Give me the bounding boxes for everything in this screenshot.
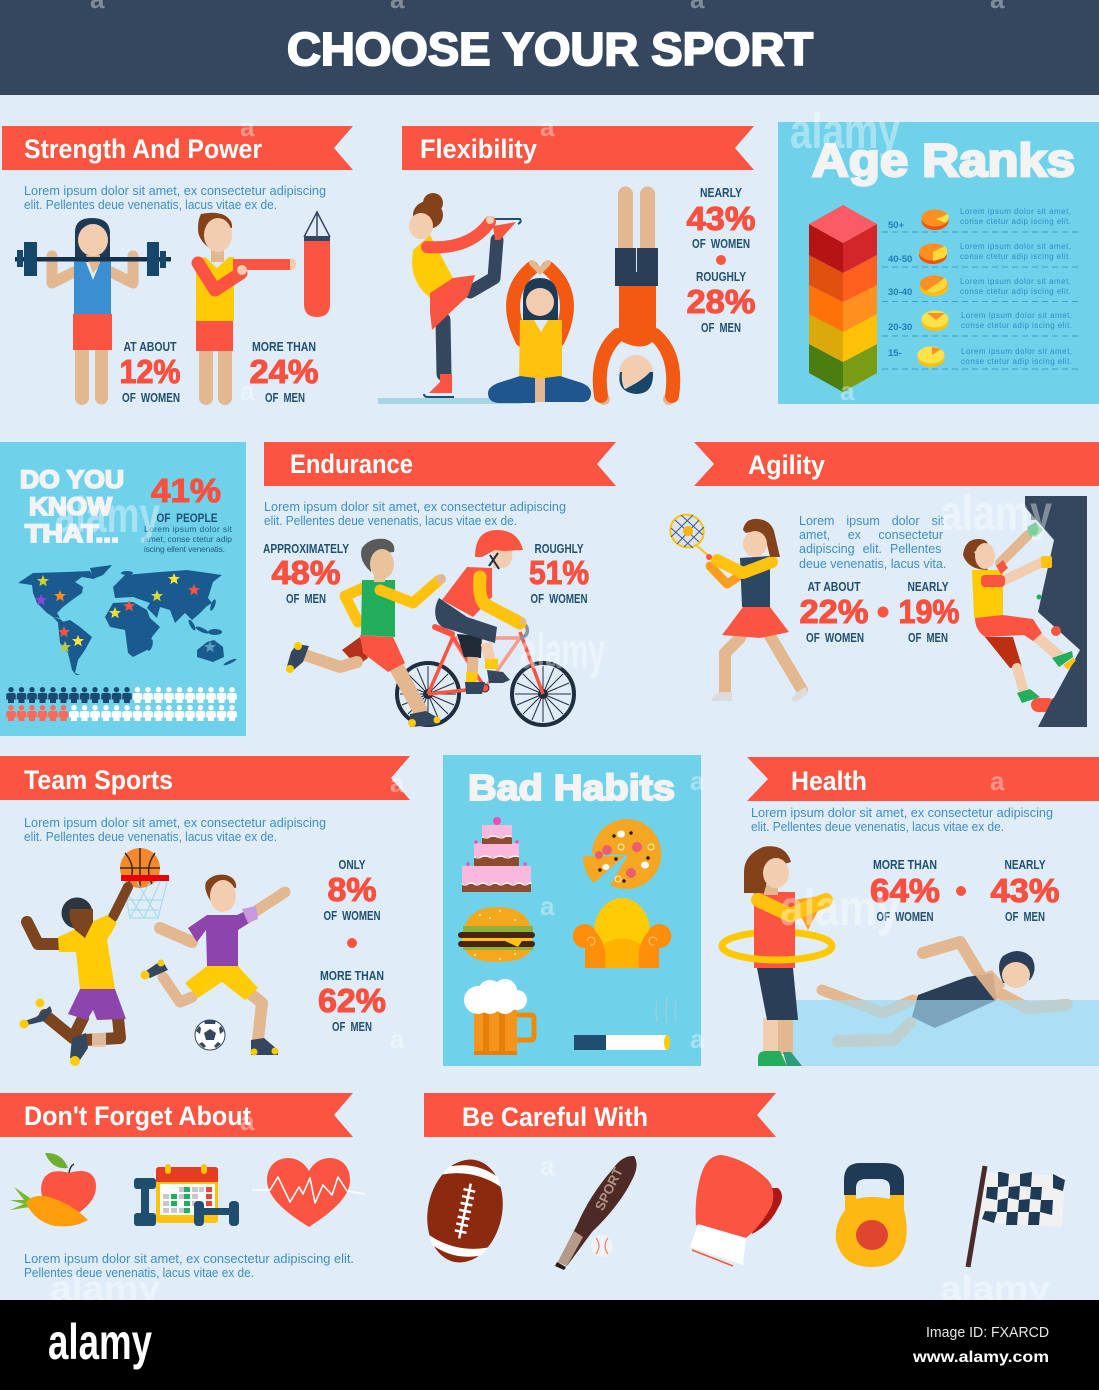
text: don't forget description xyxy=(24,1252,354,1280)
text: don't forget description: Pellentes deue venenatis, lacus vitae ex de. xyxy=(24,1266,254,1280)
heading: do you know that: DO YOU xyxy=(20,466,124,494)
icon: cake xyxy=(462,817,531,892)
text: age row notes: Lorem ipsum dolor sit amet, xyxy=(961,311,1072,320)
text: agility description xyxy=(799,514,946,571)
heading: age ranks: Age Ranks xyxy=(812,134,1075,186)
text: health description xyxy=(751,806,1053,834)
stat: men 28% xyxy=(686,270,756,335)
text: strength description xyxy=(24,184,326,212)
chart: age rows with pies: 20-30 xyxy=(888,322,912,333)
watermarks: a xyxy=(990,766,1005,796)
stat: men 24%: 24% xyxy=(250,353,318,390)
text: endurance description xyxy=(264,500,566,528)
icon: pizza xyxy=(583,819,661,889)
stat: men 43%: NEARLY xyxy=(1004,858,1046,872)
text: age row notes xyxy=(960,207,1072,366)
watermarks: alamy xyxy=(780,880,900,936)
watermarks: alamy xyxy=(940,485,1052,541)
watermarks: alamy xyxy=(790,103,900,159)
text: agility description: amet, ex consectetur xyxy=(799,528,943,542)
stat: women 51%: ROUGHLY xyxy=(534,542,584,556)
icon: cigarette xyxy=(574,997,676,1050)
pie: 15- xyxy=(918,346,944,367)
panel: don't forget about xyxy=(0,1093,365,1280)
stat: men 48%: APPROXIMATELY xyxy=(263,542,350,556)
text: age row notes: conse ctetur adip iscing elit. xyxy=(961,321,1072,330)
stat: men 24% xyxy=(250,340,318,405)
banner: agility xyxy=(694,442,1099,486)
text: age row notes: conse ctetur adip iscing elit. xyxy=(961,357,1072,366)
watermarks: a xyxy=(540,1151,555,1181)
stat: women 43% xyxy=(686,186,756,251)
chart: pictogram row one xyxy=(6,687,237,703)
figure: man punching xyxy=(196,213,296,405)
banner: don't forget about xyxy=(0,1093,353,1137)
stat: 41% of people xyxy=(144,472,233,554)
icon: burger xyxy=(458,907,535,962)
stat: men 62%: MORE THAN xyxy=(320,969,384,983)
stat: men 28%: OF MEN xyxy=(701,321,741,335)
stat: women 51%: 51% xyxy=(529,554,589,591)
stat: women 22%: AT ABOUT xyxy=(808,580,861,594)
panel: flexibility xyxy=(378,126,756,405)
figure: runner xyxy=(286,539,446,727)
watermarks: a xyxy=(540,112,555,142)
icon: boxing glove xyxy=(690,1155,782,1266)
stat: women 22% xyxy=(800,580,868,645)
stat: men 28%: 28% xyxy=(686,283,756,320)
header bar with title xyxy=(0,0,1099,95)
chart: age rows with pies xyxy=(882,207,1079,369)
stat: men 19%: OF MEN xyxy=(908,631,948,645)
watermarks: a xyxy=(240,1106,255,1136)
stat: women 43%: OF WOMEN xyxy=(692,237,750,251)
stat: men 48% xyxy=(263,542,350,606)
dot separator xyxy=(347,938,357,948)
banner: be careful with: Be Careful With xyxy=(462,1102,648,1132)
figure: soccer player xyxy=(140,875,285,1056)
stat: 41% of people: Lorem ipsum dolor sit xyxy=(144,524,233,534)
pie: 20-30 xyxy=(922,310,948,331)
chart: age rows with pies: 40-50 xyxy=(888,254,912,265)
panel: strength and power xyxy=(2,126,353,405)
heading: do you know that: KNOW xyxy=(29,493,112,521)
watermarks: a xyxy=(390,768,405,798)
heading: do you know that xyxy=(20,466,124,548)
stat: women 51%: OF WOMEN xyxy=(530,592,588,606)
banner: endurance: Endurance xyxy=(290,449,413,479)
stat: women 51% xyxy=(529,542,589,606)
icon: kettlebell xyxy=(836,1163,907,1267)
panel: bad habits xyxy=(443,755,701,1066)
figure: cyclist xyxy=(435,530,526,694)
banner: health xyxy=(747,757,1099,801)
dot separator xyxy=(716,255,726,265)
watermarks: a xyxy=(840,376,855,406)
text: agility description: Lorem ipsum dolor sit xyxy=(799,514,945,528)
text: agility description: adipiscing elit. Pellentes xyxy=(799,542,941,556)
stat: women 64%: OF WOMEN xyxy=(876,910,934,924)
heading: bad habits: Bad Habits xyxy=(468,767,675,808)
pie: 50+ xyxy=(922,210,949,230)
icon: american football xyxy=(418,1152,512,1270)
text: team sports description xyxy=(24,816,326,844)
watermarks: alamy xyxy=(55,487,160,543)
text: team sports description: elit. Pellentes deue venenatis, lacus vitae ex de. xyxy=(24,830,277,844)
icon: checkered flag xyxy=(968,1166,1065,1267)
title: CHOOSE YOUR SPORT xyxy=(287,23,813,75)
stat: women 12%: OF WOMEN xyxy=(122,391,180,405)
chart: age rows with pies: 30-40 xyxy=(888,287,912,298)
stat: men 19%: NEARLY xyxy=(908,580,949,594)
stat: men 48%: 48% xyxy=(272,554,340,591)
watermarks: a xyxy=(240,112,255,142)
text: endurance description: elit. Pellentes deue venenatis, lacus vitae ex de. xyxy=(264,514,517,528)
stat: women 8%: ONLY xyxy=(338,858,366,872)
chart: world map with stars xyxy=(18,565,237,675)
stat: men 19%: 19% xyxy=(898,593,960,630)
figure: handstand man xyxy=(598,186,675,405)
stat: men 48%: OF MEN xyxy=(286,592,326,606)
stat: 41% of people: iscing ellent venenatis. xyxy=(144,544,225,554)
pie: 40-50 xyxy=(919,244,947,264)
watermarks: a xyxy=(390,1024,405,1054)
icon: armchair xyxy=(573,898,671,968)
banner: team sports xyxy=(0,756,410,800)
panel: age ranks xyxy=(778,122,1099,404)
watermarks: alamy xyxy=(940,1270,1050,1308)
chart: age rows with pies: 15- xyxy=(888,348,902,359)
stat: women 8% xyxy=(324,858,380,923)
text: strength description: elit. Pellentes deue venenatis, lacus vitae ex de. xyxy=(24,198,277,212)
figure: basketball player xyxy=(20,887,128,1066)
text: age row notes: conse ctetur adip iscing elit. xyxy=(960,217,1071,226)
watermarks: alamy xyxy=(50,1270,160,1308)
banner: strength and power: Strength And Power xyxy=(24,134,262,164)
chart: pictogram row two xyxy=(6,705,237,721)
pie: 30-40 xyxy=(920,276,948,296)
text: agility description: deue venenatis, lacus vita. xyxy=(799,557,946,571)
text: age row notes: conse ctetur adip iscing elit. xyxy=(960,252,1071,261)
chart: isometric age column xyxy=(809,205,877,392)
stat: women 43%: 43% xyxy=(686,200,756,237)
stat: women 12%: 12% xyxy=(120,353,180,390)
stat: men 62%: OF MEN xyxy=(332,1020,372,1034)
text: age row notes: Lorem ipsum dolor sit amet, xyxy=(960,277,1071,286)
stat: women 22%: OF WOMEN xyxy=(806,631,864,645)
figure: figure skater xyxy=(378,193,522,404)
icon: bicycle xyxy=(397,624,574,725)
dot separator xyxy=(956,886,966,896)
banner: strength and power xyxy=(2,126,353,170)
panel: agility xyxy=(664,442,1099,727)
stat: women 43%: NEARLY xyxy=(700,186,743,200)
icon: baseball bat and ball xyxy=(555,1156,637,1270)
banner: health: Health xyxy=(791,766,867,796)
banner: agility: Agility xyxy=(748,450,825,480)
stat: 41% of people: OF PEOPLE xyxy=(156,513,218,525)
stat: men 62%: 62% xyxy=(318,982,386,1019)
text: age row notes: Lorem ipsum dolor sit amet, xyxy=(961,347,1072,356)
watermarks: a xyxy=(240,376,255,406)
stat: men 28%: ROUGHLY xyxy=(696,270,747,284)
banner: don't forget about: Don't Forget About xyxy=(24,1101,251,1131)
watermarks: a xyxy=(690,1024,705,1054)
figure: meditating woman xyxy=(488,263,591,403)
stat: men 19% xyxy=(898,580,960,645)
stat: men 24%: MORE THAN xyxy=(252,340,316,354)
stat: women 64%: MORE THAN xyxy=(873,858,937,872)
banner: team sports: Team Sports xyxy=(24,765,173,795)
watermarks: a xyxy=(690,766,705,796)
stat: women 8%: 8% xyxy=(328,871,376,908)
stat: men 43%: 43% xyxy=(990,872,1060,909)
stat: men 24%: OF MEN xyxy=(265,391,305,405)
icon: soccer ball xyxy=(195,1020,225,1050)
panel: health xyxy=(722,757,1099,1066)
icon: calendar and dumbbells xyxy=(134,1164,239,1226)
icon: heart with pulse xyxy=(252,1158,365,1227)
footer bar with stock credit xyxy=(0,1300,1099,1390)
stat: men 43% xyxy=(990,858,1060,924)
watermarks: a xyxy=(540,891,555,921)
logo: alamy: alamy xyxy=(48,1314,152,1370)
stat: men 62% xyxy=(318,969,386,1034)
panel: do you know that xyxy=(0,442,246,736)
icon: basketball and hoop xyxy=(120,848,169,918)
stat: women 22%: 22% xyxy=(800,593,868,630)
icon: beer mug xyxy=(464,979,534,1055)
text: strength description: Lorem ipsum dolor sit amet, ex consectetur adipiscing xyxy=(24,184,326,198)
text: endurance description: Lorem ipsum dolor sit amet, ex consectetur adipiscing xyxy=(264,500,566,514)
text: website: www.alamy.com xyxy=(912,1349,1049,1366)
text: team sports description: Lorem ipsum dolor sit amet, ex consectetur adipiscing xyxy=(24,816,326,830)
panel: team sports xyxy=(0,756,410,1066)
text: don't forget description: Lorem ipsum dolor sit amet, ex consectetur adipiscing elit. xyxy=(24,1252,354,1266)
stat: 41% of people: 41% xyxy=(151,472,221,509)
figure: swimmer in water xyxy=(790,942,1099,1066)
stat: women 12%: AT ABOUT xyxy=(124,340,177,354)
text: age row notes: Lorem ipsum dolor sit amet, xyxy=(960,242,1071,251)
banner: flexibility xyxy=(402,126,754,170)
stat: 41% of people: amet, conse ctetur adip xyxy=(144,534,232,544)
figure: rock climber on wall xyxy=(963,496,1087,727)
text: age row notes: Lorem ipsum dolor sit amet, xyxy=(960,207,1071,216)
icon: punching bag xyxy=(304,212,330,317)
text: health description: Lorem ipsum dolor sit amet, ex consectetur adipiscing xyxy=(751,806,1053,820)
dot separator xyxy=(878,606,888,618)
text: health description: elit. Pellentes deue venenatis, lacus vitae ex de. xyxy=(751,820,1004,834)
icon: apple and carrot xyxy=(10,1153,96,1226)
text: image id: Image ID: FXARCD xyxy=(926,1325,1049,1341)
stat: women 64% xyxy=(870,858,940,924)
banner: be careful with xyxy=(424,1093,776,1137)
stat: men 43%: OF MEN xyxy=(1005,910,1045,924)
heading: do you know that: THAT... xyxy=(25,520,119,548)
icon: baseball bat and ball: SPORT xyxy=(592,1164,626,1213)
stat: women 12% xyxy=(120,340,180,405)
banner: endurance xyxy=(264,442,616,486)
figure: woman with hula hoop xyxy=(722,846,832,1066)
stat: women 64%: 64% xyxy=(870,872,940,909)
chart: age rows with pies: 50+ xyxy=(888,220,905,231)
panel: endurance xyxy=(263,442,616,727)
figure: tennis player xyxy=(664,508,808,702)
text: age row notes: conse ctetur adip iscing elit. xyxy=(960,287,1071,296)
watermarks: alamy xyxy=(520,623,605,679)
stat: women 8%: OF WOMEN xyxy=(324,909,380,923)
panel: be careful with xyxy=(418,1093,1065,1270)
figure: woman lifting barbell xyxy=(15,218,171,405)
banner: flexibility: Flexibility xyxy=(420,134,537,164)
